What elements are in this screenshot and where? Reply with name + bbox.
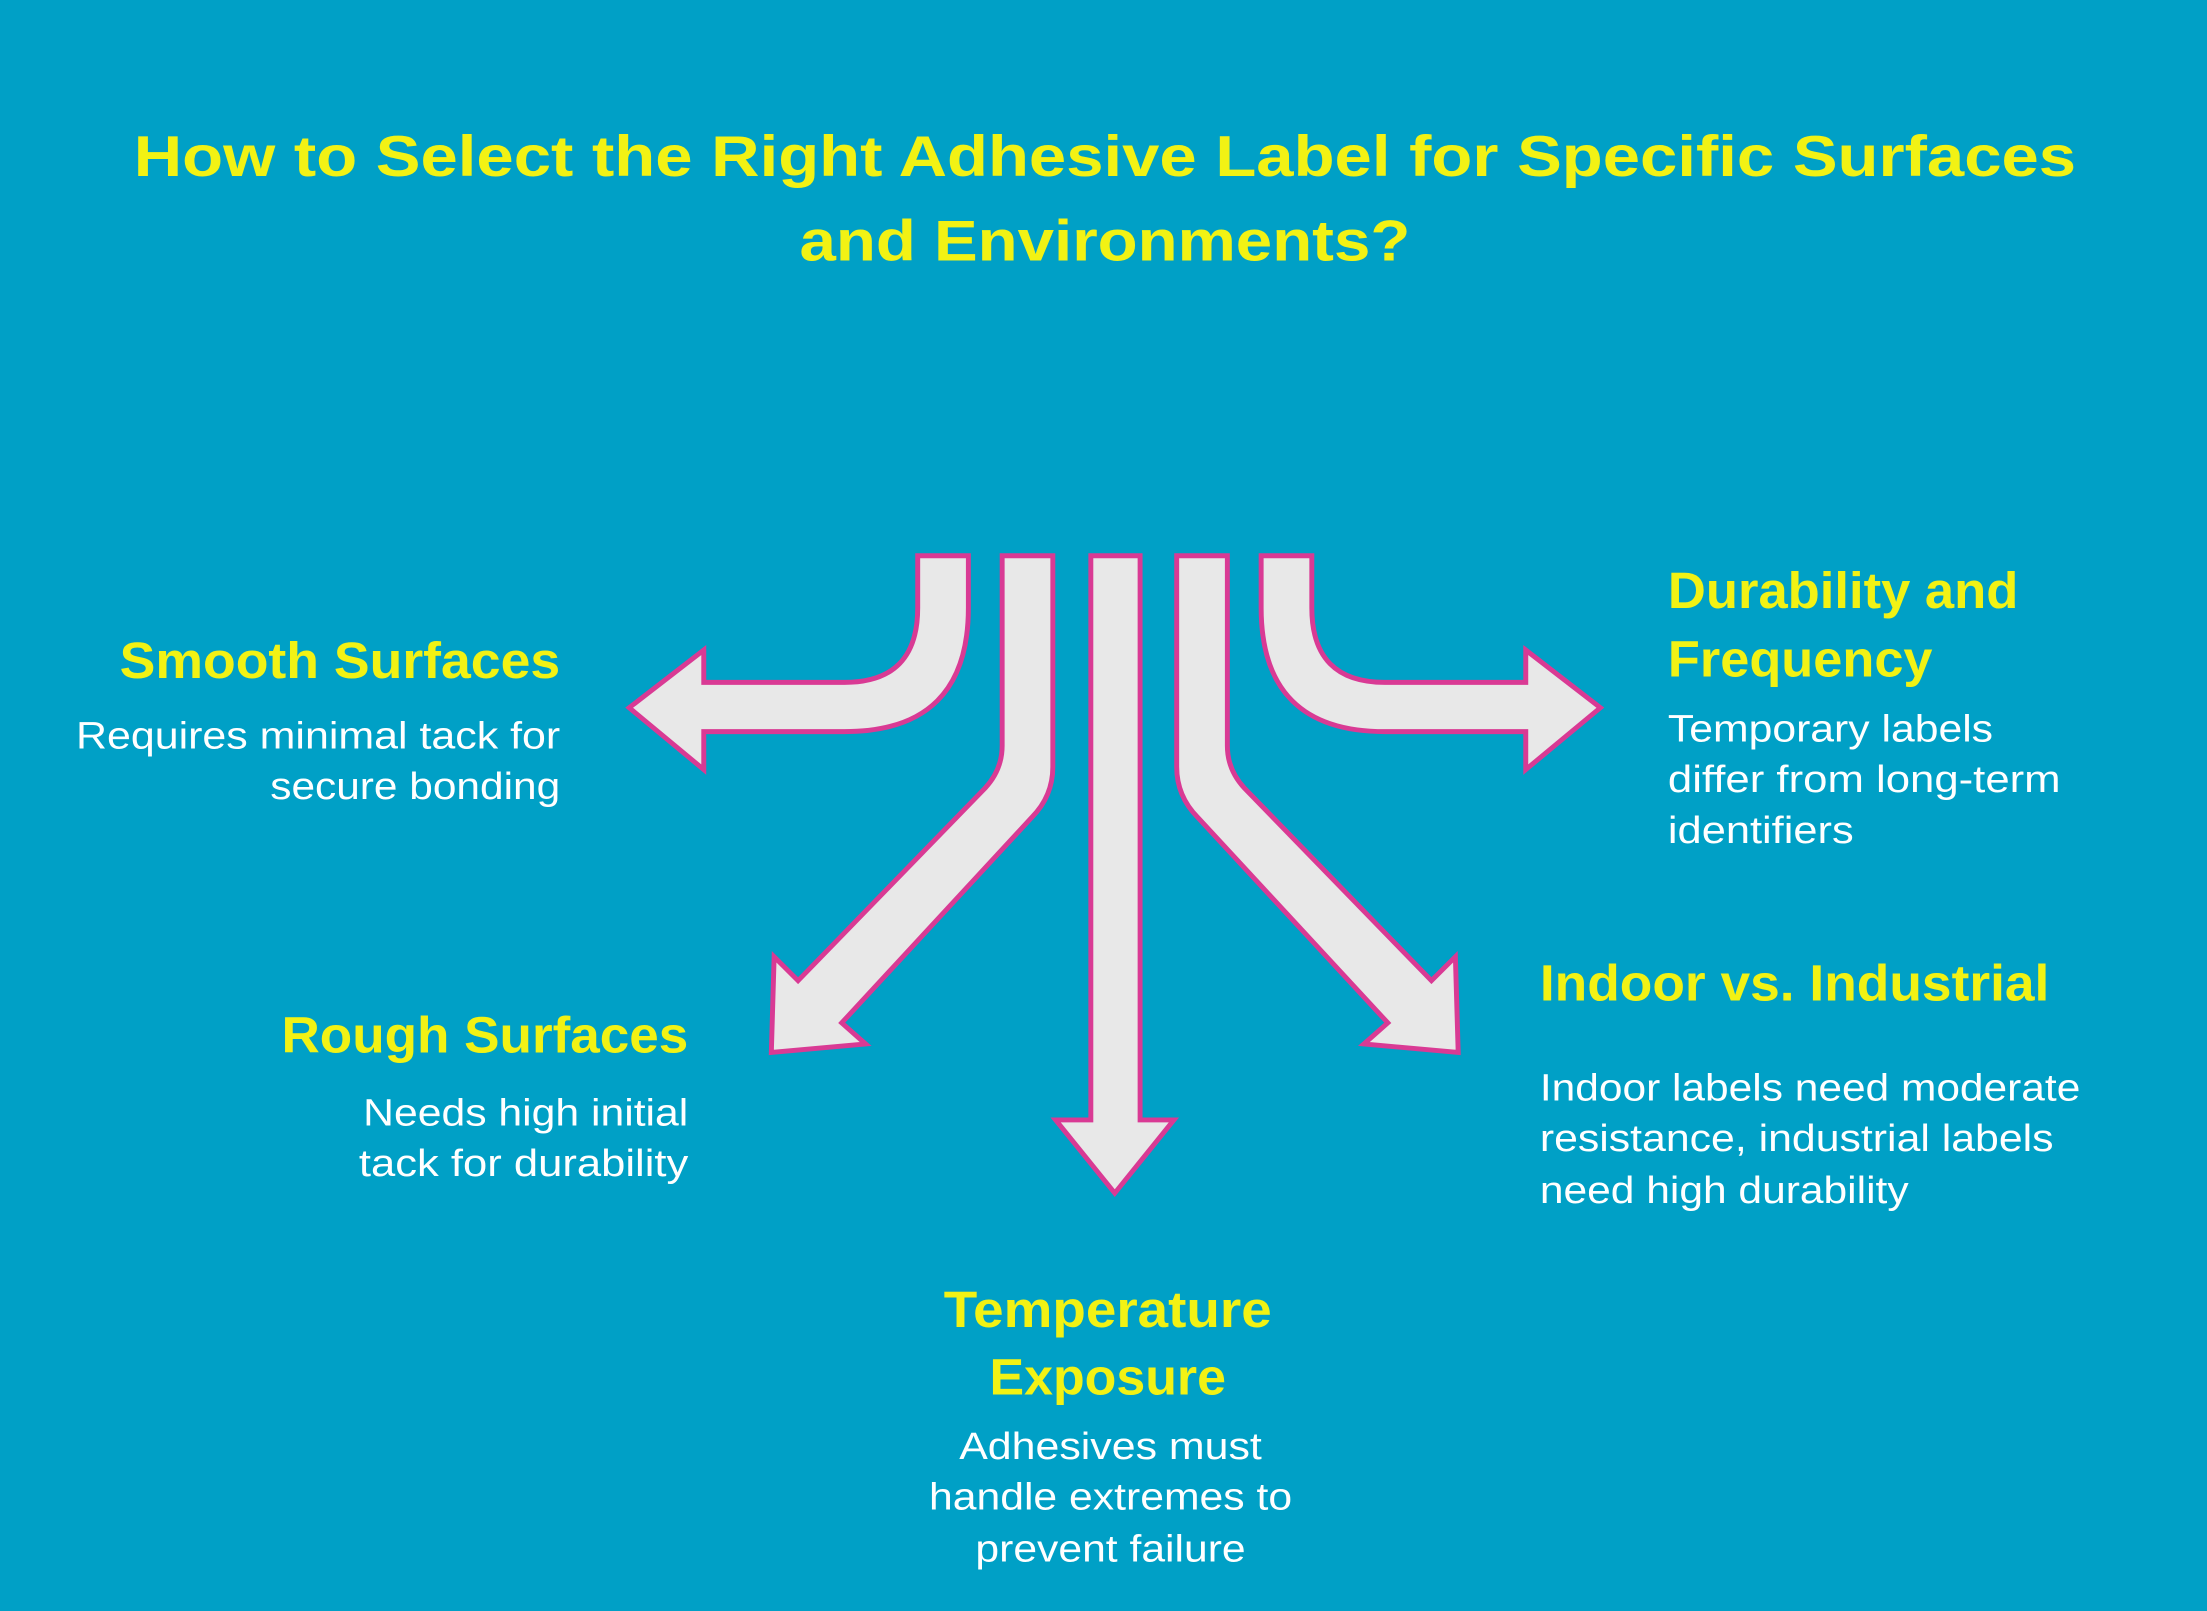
text: durability and frequency: Temporary labels [1668,708,1993,750]
arrows diagram [629,556,1600,1193]
text: rough surfaces [282,1006,688,1185]
title [134,125,2076,273]
text: indoor vs industrial: Indoor vs. Industrial [1540,954,2049,1011]
text: rough surfaces: Needs high initial [363,1093,688,1135]
text: indoor vs industrial: need high durability [1540,1170,1909,1212]
text: durability and frequency: identifiers [1668,810,1854,852]
arrow: down-right to indoor vs industrial [1177,556,1458,1052]
arrow: left to smooth surfaces [629,556,968,770]
text: indoor vs industrial: Indoor labels need moderate [1540,1067,2080,1109]
text: durability and frequency [1668,562,2061,852]
arrow: right to durability [1261,556,1600,770]
text: indoor vs industrial: resistance, industrial labels [1540,1118,2054,1160]
title: and Environments? [799,209,1410,273]
text: temperature exposure: handle extremes to [929,1477,1292,1519]
arrow: down to temperature [1056,556,1174,1193]
text: temperature exposure: Adhesives must [959,1426,1262,1468]
text: temperature exposure: Temperature [944,1281,1272,1338]
text: rough surfaces: Rough Surfaces [282,1006,688,1063]
text: smooth surfaces: Smooth Surfaces [120,632,560,689]
text: indoor vs industrial [1540,954,2080,1212]
text: temperature exposure [929,1281,1292,1571]
text: smooth surfaces: secure bonding [270,766,560,808]
text: durability and frequency: differ from long-term [1668,759,2061,801]
text: durability and frequency: Frequency [1668,631,1933,688]
text: temperature exposure: Exposure [989,1348,1226,1405]
title: How to Select the Right Adhesive Label for Specific Surfaces [134,125,2076,189]
text: temperature exposure: prevent failure [975,1529,1246,1571]
text: rough surfaces: tack for durability [359,1143,688,1185]
text: smooth surfaces [76,632,561,808]
text: durability and frequency: Durability and [1668,562,2018,619]
text: smooth surfaces: Requires minimal tack for [76,716,561,758]
arrow: down-left to rough surfaces [771,556,1053,1052]
